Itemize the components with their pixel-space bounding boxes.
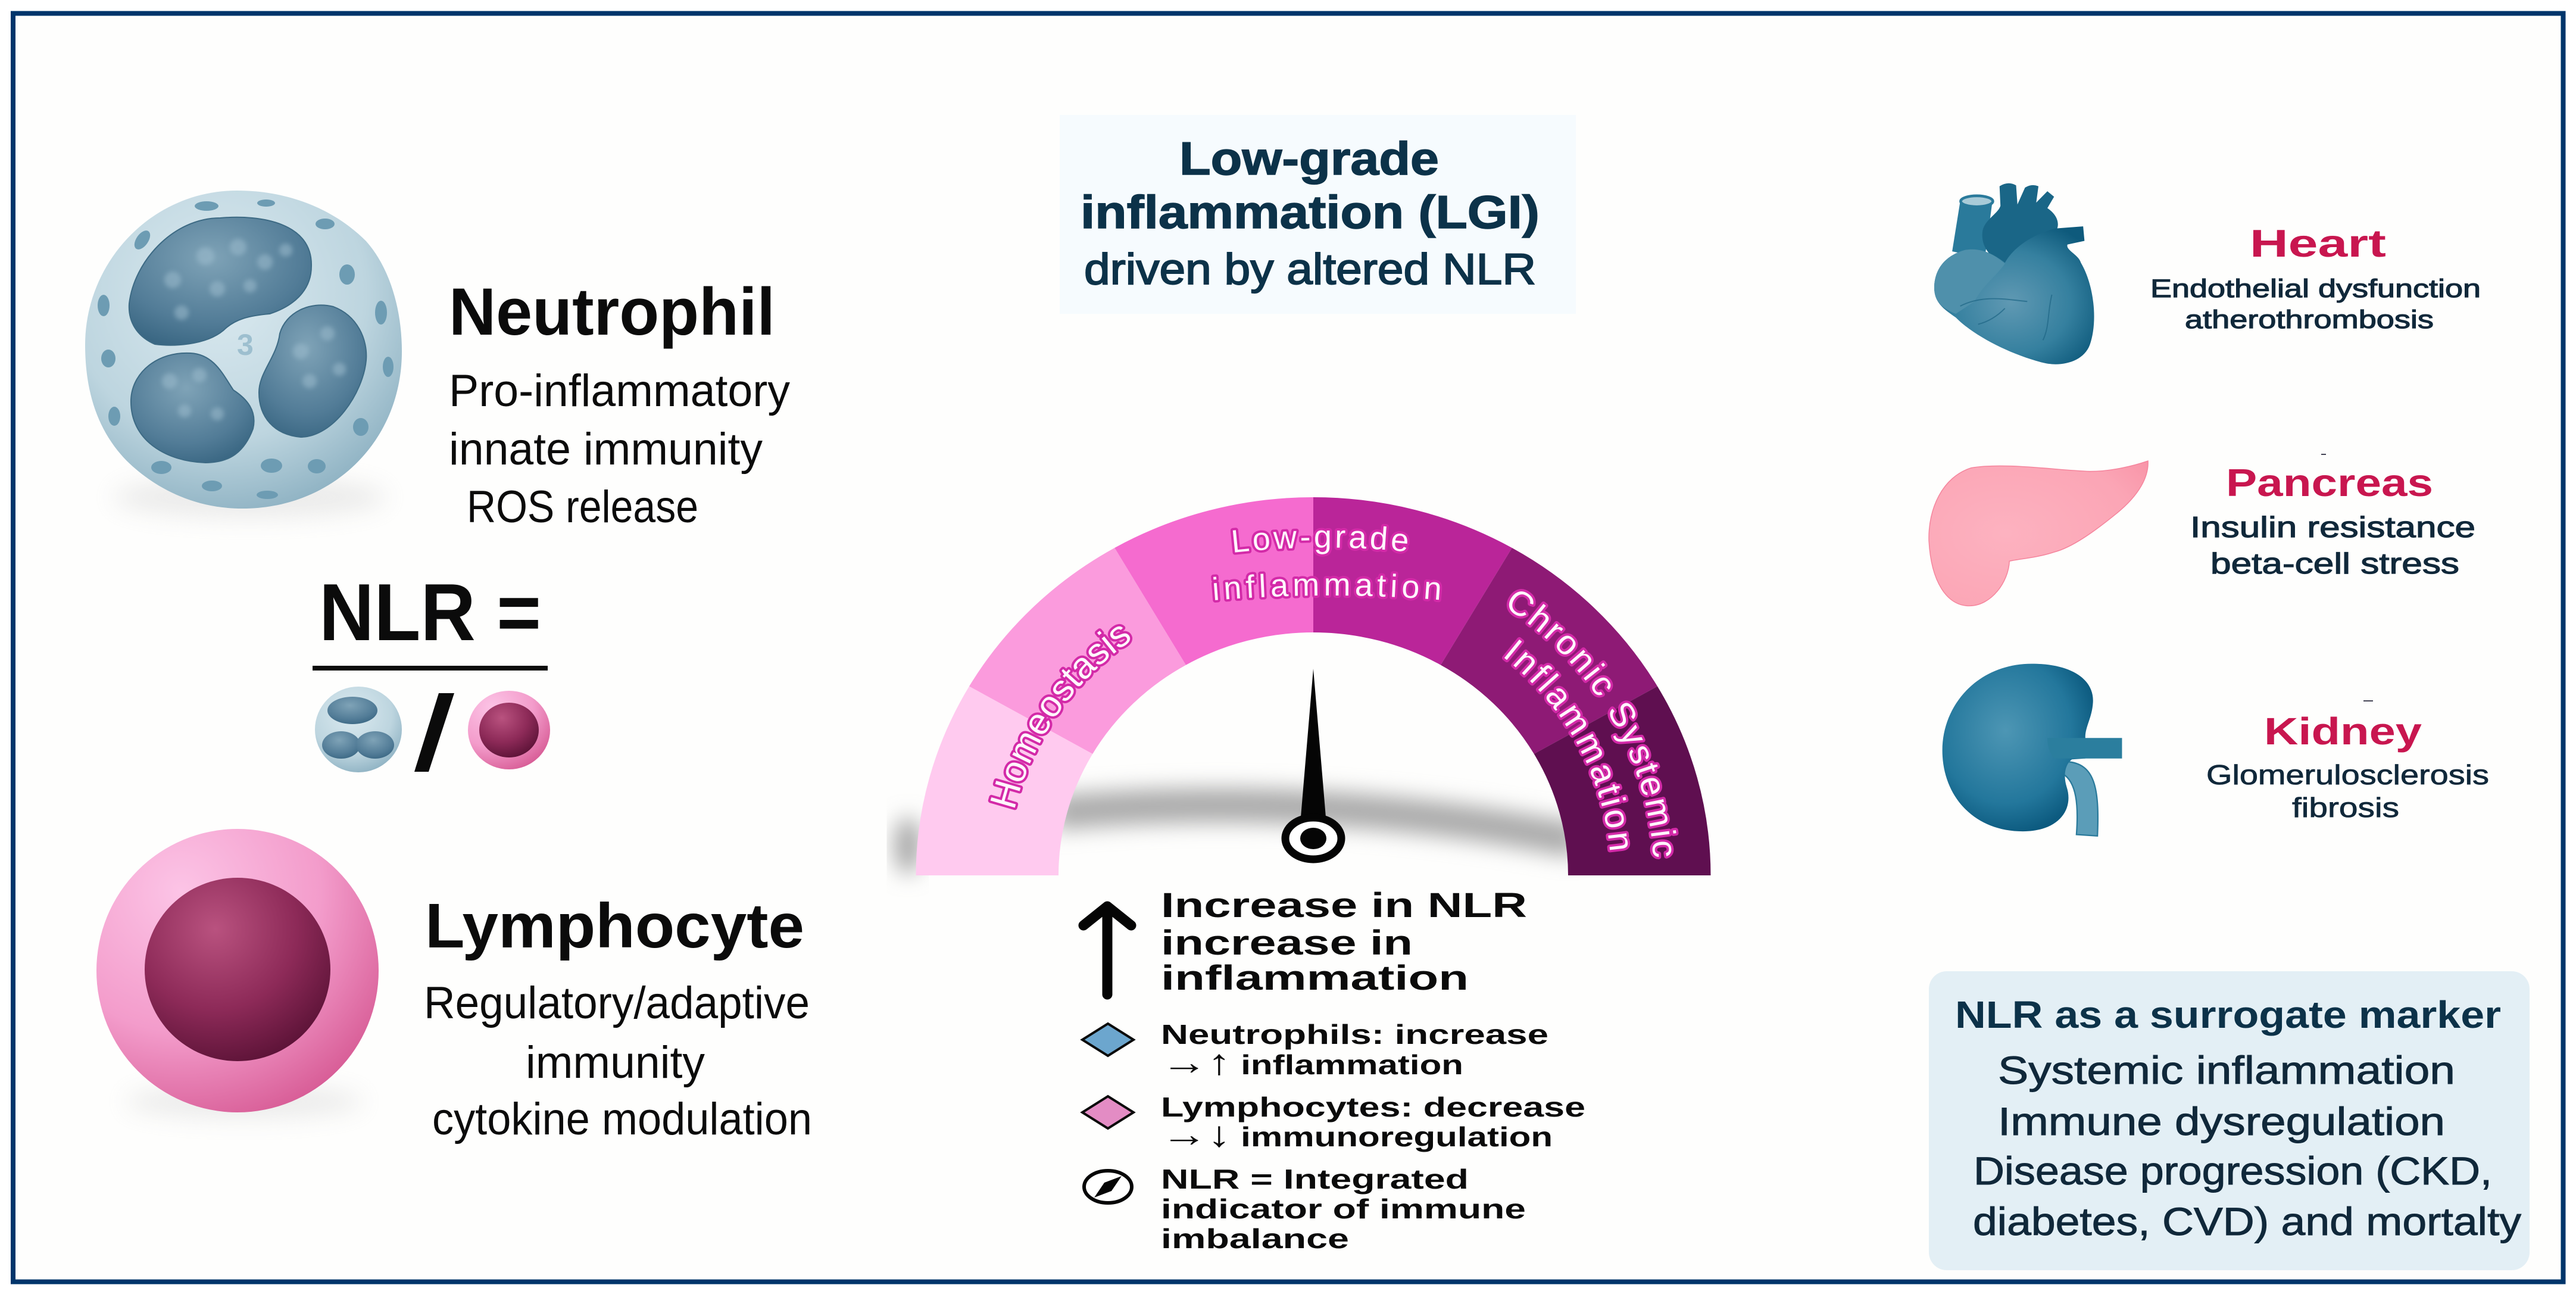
panel: lymphocyte	[96, 829, 812, 1145]
heading: Lymphocyte: Lymphocyte	[425, 891, 804, 961]
panel: pancreas	[1929, 454, 2475, 606]
text: lymphocytes: →↓ immunoregulation	[1161, 1114, 1553, 1154]
text: marker list: Immune dysregulation	[1998, 1099, 2445, 1143]
heading: Pancreas: Pancreas	[2226, 461, 2433, 504]
gauge segments	[916, 497, 1711, 875]
text: increase in NLR	[1161, 886, 1527, 997]
heading: Kidney: Kidney	[2264, 710, 2422, 753]
text: increase in NLR: inflammation	[1161, 959, 1469, 997]
panel: surrogate marker	[1929, 971, 2530, 1270]
mark	[2363, 700, 2373, 701]
arrow: up	[1084, 906, 1131, 994]
text: marker list	[1973, 1048, 2521, 1243]
text: heart effects: atherothrombosis	[2185, 305, 2434, 334]
panel: NLR key messages	[1082, 886, 1585, 1254]
gauge label: Low-grade: Low-grade	[1230, 524, 1410, 557]
icon: lymphocyte cell	[96, 829, 379, 1118]
icon: neutrophil cell	[85, 191, 402, 518]
text: neutrophils: →↑ inflammation	[1161, 1042, 1463, 1082]
title background	[1060, 115, 1576, 314]
text: integrated indicator: imbalance	[1161, 1223, 1349, 1254]
text: marker list: Systemic inflammation	[1998, 1048, 2455, 1092]
fraction line	[313, 666, 548, 671]
title text: Low-grade	[1179, 132, 1439, 185]
text: kidney effects: fibrosis	[2292, 792, 2399, 823]
gauge label: Chronic Systemic: Chronic Systemic	[1506, 589, 1679, 859]
icon: heart	[1934, 183, 2094, 364]
text: lymphocyte description: immunity	[526, 1037, 705, 1088]
icon: pancreas	[1929, 461, 2148, 606]
title text	[1081, 132, 1540, 294]
text: kidney effects	[2206, 759, 2489, 823]
text: neutrophil description: ROS release	[467, 482, 698, 532]
icon: small neutrophil	[315, 687, 402, 772]
text: neutrophil description	[449, 366, 790, 532]
gauge needle	[1285, 669, 1341, 859]
icon: blue diamond	[1082, 1024, 1134, 1056]
icon: kidney	[1943, 664, 2122, 836]
text: marker list: Disease progression (CKD,	[1974, 1149, 2492, 1193]
panel: NLR formula	[313, 567, 550, 772]
title text: inflammation (LGI)	[1081, 186, 1540, 238]
text: lymphocytes: Lymphocytes: decrease	[1161, 1092, 1585, 1122]
heading: NLR as a surrogate marker: NLR as a surrogate marker	[1955, 993, 2501, 1036]
text: neutrophil description: Pro-inflammatory	[449, 366, 790, 416]
mark	[2321, 454, 2326, 455]
title text: driven by altered NLR	[1084, 245, 1536, 294]
text: pancreas effects: beta-cell stress	[2210, 548, 2459, 580]
gauge label: inflammation: inflammation	[1211, 572, 1442, 603]
gauge label: Inflammation: Inflammation	[1502, 637, 1630, 853]
text: lymphocyte description: Regulatory/adaptive	[424, 978, 810, 1028]
gauge label: Homeostasis: Homeostasis	[988, 624, 1132, 810]
text: neutrophil description: innate immunity	[449, 424, 763, 475]
text: kidney effects: Glomerulosclerosis	[2206, 759, 2489, 790]
icon: neutrophil cell: 3	[237, 328, 254, 361]
heading: Neutrophil: Neutrophil	[449, 275, 775, 349]
text: neutrophils	[1161, 1019, 1548, 1082]
text: integrated indicator: indicator of immune	[1161, 1193, 1526, 1224]
text: increase in NLR: increase in	[1161, 924, 1413, 962]
text: integrated indicator: NLR = Integrated	[1161, 1164, 1469, 1195]
panel background	[1929, 971, 2530, 1270]
text: pancreas effects: Insulin resistance	[2190, 512, 2475, 544]
text: increase in NLR: Increase in NLR	[1161, 886, 1527, 925]
text: heart effects	[2150, 275, 2481, 334]
panel: kidney	[1943, 664, 2489, 836]
heading: Heart: Heart	[2250, 222, 2386, 265]
text: lymphocyte description	[424, 978, 812, 1145]
gauge: inflammation scale	[887, 497, 1711, 884]
text: lymphocytes	[1161, 1092, 1585, 1154]
text: neutrophils: Neutrophils: increase	[1161, 1019, 1548, 1050]
text: marker list: diabetes, CVD) and mortalty	[1973, 1199, 2521, 1243]
panel: neutrophil	[85, 191, 790, 532]
panel: heart	[1934, 183, 2481, 364]
icon: small lymphocyte	[468, 691, 550, 769]
panel: title	[1060, 115, 1576, 314]
icon: compass	[1084, 1171, 1132, 1203]
gauge ground shadow	[895, 805, 1578, 874]
icon: pink diamond	[1082, 1096, 1134, 1128]
heading: NLR =: NLR =	[319, 567, 541, 657]
text: pancreas effects	[2190, 512, 2475, 580]
text: integrated indicator	[1161, 1164, 1526, 1254]
text: heart effects: Endothelial dysfunction	[2150, 275, 2481, 303]
slash	[414, 693, 454, 772]
text: lymphocyte description: cytokine modulation	[432, 1094, 812, 1145]
